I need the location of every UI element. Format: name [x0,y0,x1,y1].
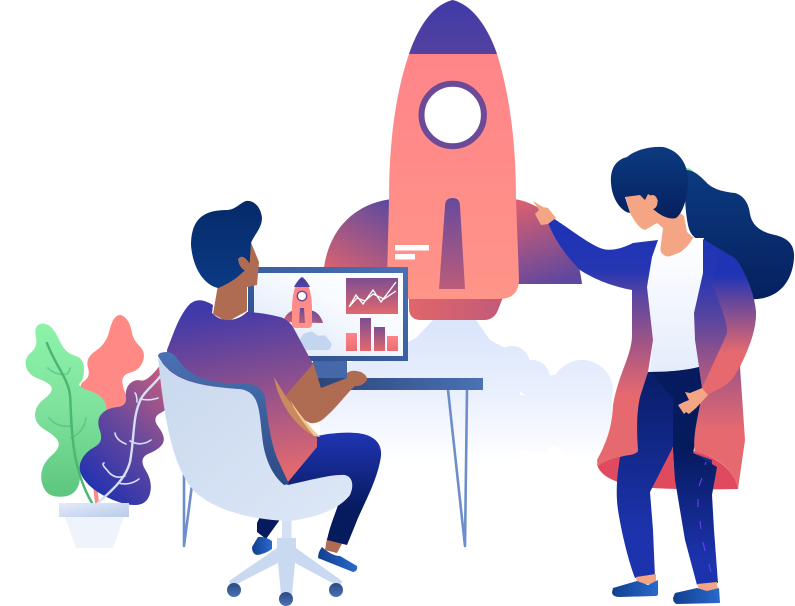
desk left leg [184,470,192,546]
man ear [238,257,250,271]
office chair [158,352,352,606]
woman left shoe [612,580,658,597]
purple leaf [80,350,172,505]
trouser stitching [698,462,711,572]
chair casters [227,583,343,606]
man ankle [325,538,343,553]
woman right shoe [673,588,720,604]
man t-shirt [167,300,317,482]
cloud behind rocket [320,320,613,460]
potted plant [26,315,172,548]
man far leg [257,500,284,539]
woman cardigan left side [548,218,658,466]
green leaf veins [47,343,92,503]
desk [184,378,483,546]
chair stem [282,517,292,541]
pink leaf [80,315,144,443]
man trousers [270,433,381,545]
bar chart [346,318,398,351]
woman cardigan right side [694,239,756,489]
woman hand on hip [678,388,708,414]
woman ankles [636,574,718,592]
pot base [65,517,124,548]
monitor stand [313,361,347,378]
chair base [229,538,342,595]
hair tie [678,168,696,190]
rocket porthole [422,84,484,146]
woman neck and face [625,190,694,258]
man arm [280,362,367,423]
monitor frame [248,267,408,361]
woman trousers [617,367,718,585]
pot rim [59,503,129,517]
woman hair [611,147,688,218]
computer monitor [248,267,408,378]
man shirt fold highlight [290,400,320,437]
line chart [346,278,398,314]
cardigan lining [597,447,738,489]
rocket right fin [514,199,582,284]
pink stem [95,485,97,503]
white stems [98,374,162,503]
monitor screen [254,273,403,356]
rocket nozzle [409,292,505,320]
rocket body [387,0,519,299]
rocket labels [395,245,429,260]
mini rocket [283,277,323,328]
man neck [213,240,259,322]
woman standing and pointing [533,147,794,604]
woman right sleeve [702,250,756,396]
rocket left fin [323,199,392,283]
rocket flame window [439,198,465,289]
chair shell [158,357,352,521]
desk top [315,378,483,390]
woman ponytail [685,170,794,299]
chair back edge [158,352,289,485]
woman t-shirt [647,238,704,372]
man seated at desk [158,201,381,606]
man right shoe [318,547,357,572]
man shirt fold [274,377,320,437]
rocket nose [409,0,497,54]
rocket [323,0,582,320]
woman ear [648,195,658,209]
woman pointing hand [533,201,556,225]
desk right leg [448,390,467,546]
mini cloud [297,331,332,350]
man left shoe [252,537,272,555]
man hair [191,201,262,288]
green leaf [26,324,107,497]
